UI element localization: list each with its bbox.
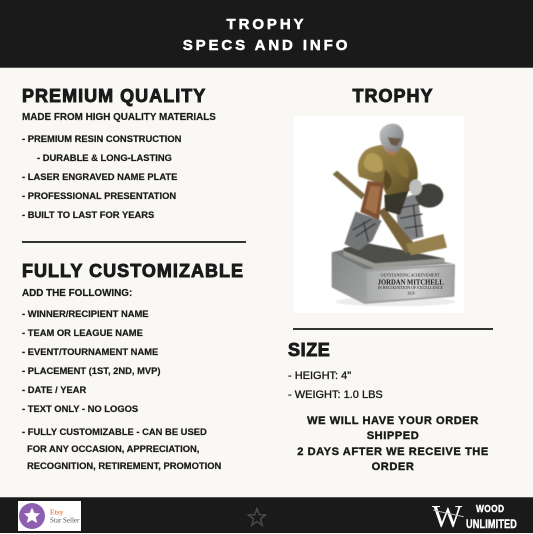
header title: TROPHY (227, 16, 306, 33)
shipping note: 2 DAYS AFTER WE RECEIVE THE (297, 446, 489, 458)
shipping note: ORDER (372, 461, 414, 473)
list: quality features: - DURABLE & LONG-LASTING (37, 152, 172, 163)
catch glove (415, 184, 443, 208)
plate text: OUTSTANDING ACHIEVEMENT (381, 274, 441, 278)
header title (182, 16, 350, 54)
subheading: materials: MADE FROM HIGH QUALITY MATERIALS (22, 112, 216, 123)
list: customization options (22, 308, 161, 414)
shipping note (297, 415, 489, 473)
heading: trophy: TROPHY (352, 86, 434, 106)
badge: etsy star seller: Star Seller (50, 516, 80, 524)
note: occasions (22, 426, 221, 471)
shipping note: WE WILL HAVE YOUR ORDER (307, 415, 479, 427)
logo: wood unlimited (432, 498, 517, 534)
helmet (380, 124, 404, 155)
legs (344, 212, 382, 251)
plate text: JORDAN MITCHELL (378, 278, 444, 287)
logo text: unlimited: UNLIMITED (466, 517, 517, 531)
panel: fully customizable (22, 261, 244, 471)
badge: etsy star seller: Etsy (50, 508, 64, 516)
list: customization options: - PLACEMENT (1ST, 2ND, MVP) (22, 365, 161, 376)
plate text: IN RECOGNITION OF EXCELLENCE (378, 286, 444, 290)
list: customization options: - TEAM OR LEAGUE NAME (22, 327, 143, 338)
base (332, 243, 455, 306)
blocker (360, 181, 384, 220)
panel: premium quality (22, 86, 246, 243)
logo mark: W (432, 498, 462, 534)
badge: etsy star seller (18, 501, 81, 531)
note: occasions: RECOGNITION, RETIREMENT, PROMOTION (27, 460, 221, 471)
logo text: wood: WOOD (476, 503, 504, 515)
trophy photo (294, 116, 464, 313)
list: quality features: - BUILT TO LAST FOR YEARS (22, 209, 154, 220)
plate text: 2026 (407, 292, 415, 296)
goalie figure (333, 124, 447, 255)
list: quality features: - LASER ENGRAVED NAME PLATE (22, 171, 177, 182)
list: customization options: - WINNER/RECIPIENT NAME (22, 308, 149, 319)
icon: star (247, 507, 267, 527)
heading: premium quality: PREMIUM QUALITY (22, 86, 206, 106)
heading: size: SIZE (288, 340, 330, 360)
subheading: add the following: ADD THE FOLLOWING: (22, 288, 132, 299)
shipping note: SHIPPED (367, 430, 419, 442)
header title: SPECS AND INFO (183, 37, 350, 54)
plate text (378, 274, 444, 296)
panel: size (288, 340, 383, 401)
header band (0, 0, 533, 68)
list: customization options: - TEXT ONLY - NO LOGOS (22, 403, 138, 414)
footer band (0, 497, 533, 533)
note: occasions: FOR ANY OCCASION, APPRECIATION, (27, 443, 199, 454)
list: customization options: - DATE / YEAR (22, 384, 86, 395)
list: quality features (22, 133, 181, 220)
list: quality features: - PROFESSIONAL PRESENTATION (22, 190, 176, 201)
list: customization options: - EVENT/TOURNAMENT NAME (22, 346, 158, 357)
heading: fully customizable: FULLY CUSTOMIZABLE (22, 261, 244, 281)
spec: height: - HEIGHT: 4" (288, 370, 351, 382)
note: occasions: - FULLY CUSTOMIZABLE - CAN BE USED (22, 426, 207, 437)
stick shaft (333, 171, 365, 199)
torso (358, 145, 418, 195)
spec: weight: - WEIGHT: 1.0 LBS (288, 389, 383, 401)
list: quality features: - PREMIUM RESIN CONSTRUCTION (22, 133, 181, 144)
